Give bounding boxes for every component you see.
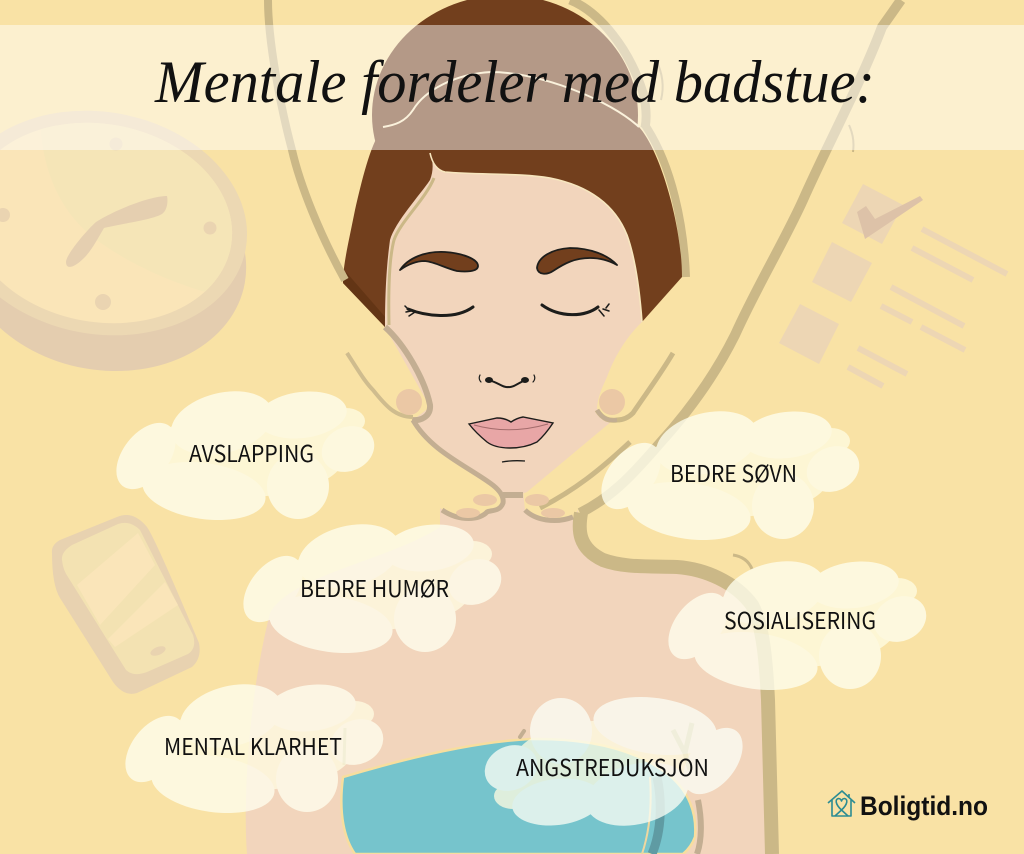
closed eyes — [405, 304, 609, 316]
lips — [469, 417, 553, 448]
face — [347, 153, 673, 521]
cloud: BEDRE HUMØR — [231, 514, 509, 660]
eyebrows — [400, 248, 617, 274]
arms and hands — [268, 0, 901, 513]
shoulder contour line — [580, 513, 772, 854]
icon: house with heart — [828, 791, 855, 816]
cloud: BEDRE SØVN: BEDRE SØVN — [670, 455, 797, 489]
cloud: ANGSTREDUKSJON: ANGSTREDUKSJON — [516, 749, 709, 783]
logo: Boligtid.no: Boligtid.no — [860, 791, 988, 821]
nose — [479, 375, 535, 387]
icon: checklist — [779, 184, 1007, 386]
cloud: AVSLAPPING — [104, 381, 382, 527]
cloud: SOSIALISERING — [656, 551, 934, 697]
woman's body — [246, 490, 772, 854]
cloud: SOSIALISERING: SOSIALISERING — [724, 602, 876, 636]
towel — [341, 555, 752, 854]
cloud: ANGSTREDUKSJON — [477, 690, 755, 836]
cloud: MENTAL KLARHET: MENTAL KLARHET — [164, 728, 342, 762]
cloud: BEDRE SØVN — [589, 401, 867, 547]
title band — [0, 25, 1024, 150]
cloud: BEDRE HUMØR: BEDRE HUMØR — [300, 570, 449, 604]
cloud: MENTAL KLARHET — [113, 674, 391, 820]
cloud: AVSLAPPING: AVSLAPPING — [189, 435, 314, 469]
hair — [343, 0, 854, 327]
title: Mentale fordeler med badstue: — [154, 49, 875, 115]
icon: clock — [0, 122, 247, 371]
icon: phone — [52, 515, 200, 694]
